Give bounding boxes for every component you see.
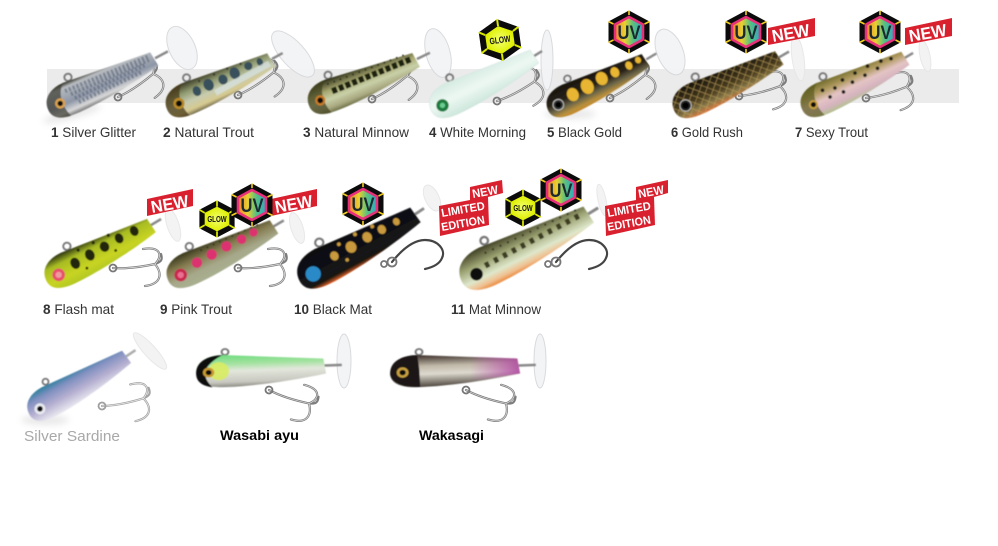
label: 3 Natural Minnow: 3 Natural Minnow: [303, 124, 410, 140]
badge: UV on lure 9: UV: [240, 196, 264, 217]
lure 4: White Morning: [420, 30, 553, 124]
label: 9 Pink Trout: 9 Pink Trout: [160, 301, 232, 317]
lure 10: Black Mat: [286, 182, 444, 296]
badge: NEW LIMITED EDITION on lure 11: [605, 180, 668, 236]
label: 8 Flash mat: 8 Flash mat: [43, 301, 114, 317]
lure 3: Natural Minnow: [300, 26, 456, 119]
badge: UV on lure 5: UV: [618, 23, 641, 44]
lure 1: Silver Glitter: [38, 22, 204, 127]
label: 11 Mat Minnow: 11 Mat Minnow: [451, 301, 542, 317]
lure 11: Mat Minnow: [448, 184, 609, 298]
badge: NEW on lure 9: NEW: [273, 191, 315, 217]
lure 8: Flash mat: [35, 201, 184, 294]
row 3 lures: [18, 329, 546, 427]
badge: UV on lure 7: [860, 10, 900, 54]
label: Silver Sardine: Silver Sardine: [24, 428, 120, 445]
badge: NEW LIMITED EDITION on lure 10: EDITION: [440, 214, 486, 234]
badge: UV on lure 9: [232, 184, 272, 226]
lure: Silver Sardine: [18, 329, 171, 427]
lure: Wakasagi: [389, 334, 546, 426]
badge: GLOW on lure 11: [505, 190, 541, 226]
label: 10 Black Mat: 10 Black Mat: [294, 301, 372, 317]
row 2 lures: [35, 168, 668, 298]
label: Wakasagi: Wakasagi: [419, 427, 484, 443]
badge: UV on lure 5: [608, 10, 650, 54]
badge: UV on lure 11: [540, 168, 582, 212]
badge: NEW LIMITED EDITION on lure 10: LIMITED: [440, 200, 486, 220]
badge: NEW LIMITED EDITION on lure 10: [439, 180, 503, 236]
badge: NEW LIMITED EDITION on lure 11: EDITION: [606, 214, 652, 234]
lure: Wasabi ayu: [195, 334, 351, 426]
badge: NEW LIMITED EDITION on lure 10: NEW: [471, 183, 500, 201]
label: 5 Black Gold: 5 Black Gold: [547, 124, 622, 140]
row 1 lures: [38, 10, 952, 127]
lure 6: Gold Rush: [664, 33, 807, 124]
badge: NEW LIMITED EDITION on lure 11: NEW: [637, 183, 666, 201]
label: 7 Sexy Trout: 7 Sexy Trout: [795, 124, 868, 140]
badge: NEW on lure 8: NEW: [149, 191, 191, 217]
badge: NEW LIMITED EDITION on lure 11: LIMITED: [606, 200, 652, 220]
label: 2 Natural Trout: 2 Natural Trout: [163, 124, 254, 140]
label: 1 Silver Glitter: 1 Silver Glitter: [51, 124, 136, 140]
badge: NEW on lure 6: NEW: [770, 20, 812, 46]
badge: UV on lure 10: UV: [352, 195, 375, 216]
badge: NEW on lure 7: NEW: [907, 20, 949, 46]
badge: UV on lure 11: UV: [550, 181, 573, 202]
badge: GLOW: GLOW: [489, 34, 511, 46]
label: 4 White Morning: 4 White Morning: [429, 124, 526, 140]
lure 5: Black Gold: [538, 25, 691, 123]
badge: GLOW on lure 9: GLOW: [207, 215, 227, 224]
badge: UV on lure 10: [342, 182, 384, 226]
lure 7: Sexy Trout: [792, 35, 933, 123]
badge: GLOW on lure 9: [199, 201, 235, 237]
badge: UV on lure 7: UV: [868, 23, 892, 44]
lure 2: Natural Trout: [157, 24, 321, 123]
lure 9: Pink Trout: [157, 202, 308, 294]
badge: UV on lure 6: [726, 10, 766, 54]
badge: GLOW: [477, 16, 523, 64]
grey background band: [47, 69, 959, 103]
badge: GLOW on lure 11: GLOW: [513, 204, 533, 213]
label: 6 Gold Rush: 6 Gold Rush: [671, 124, 743, 140]
badge: UV on lure 6: UV: [734, 23, 758, 44]
label: Wasabi ayu: Wasabi ayu: [220, 427, 299, 443]
